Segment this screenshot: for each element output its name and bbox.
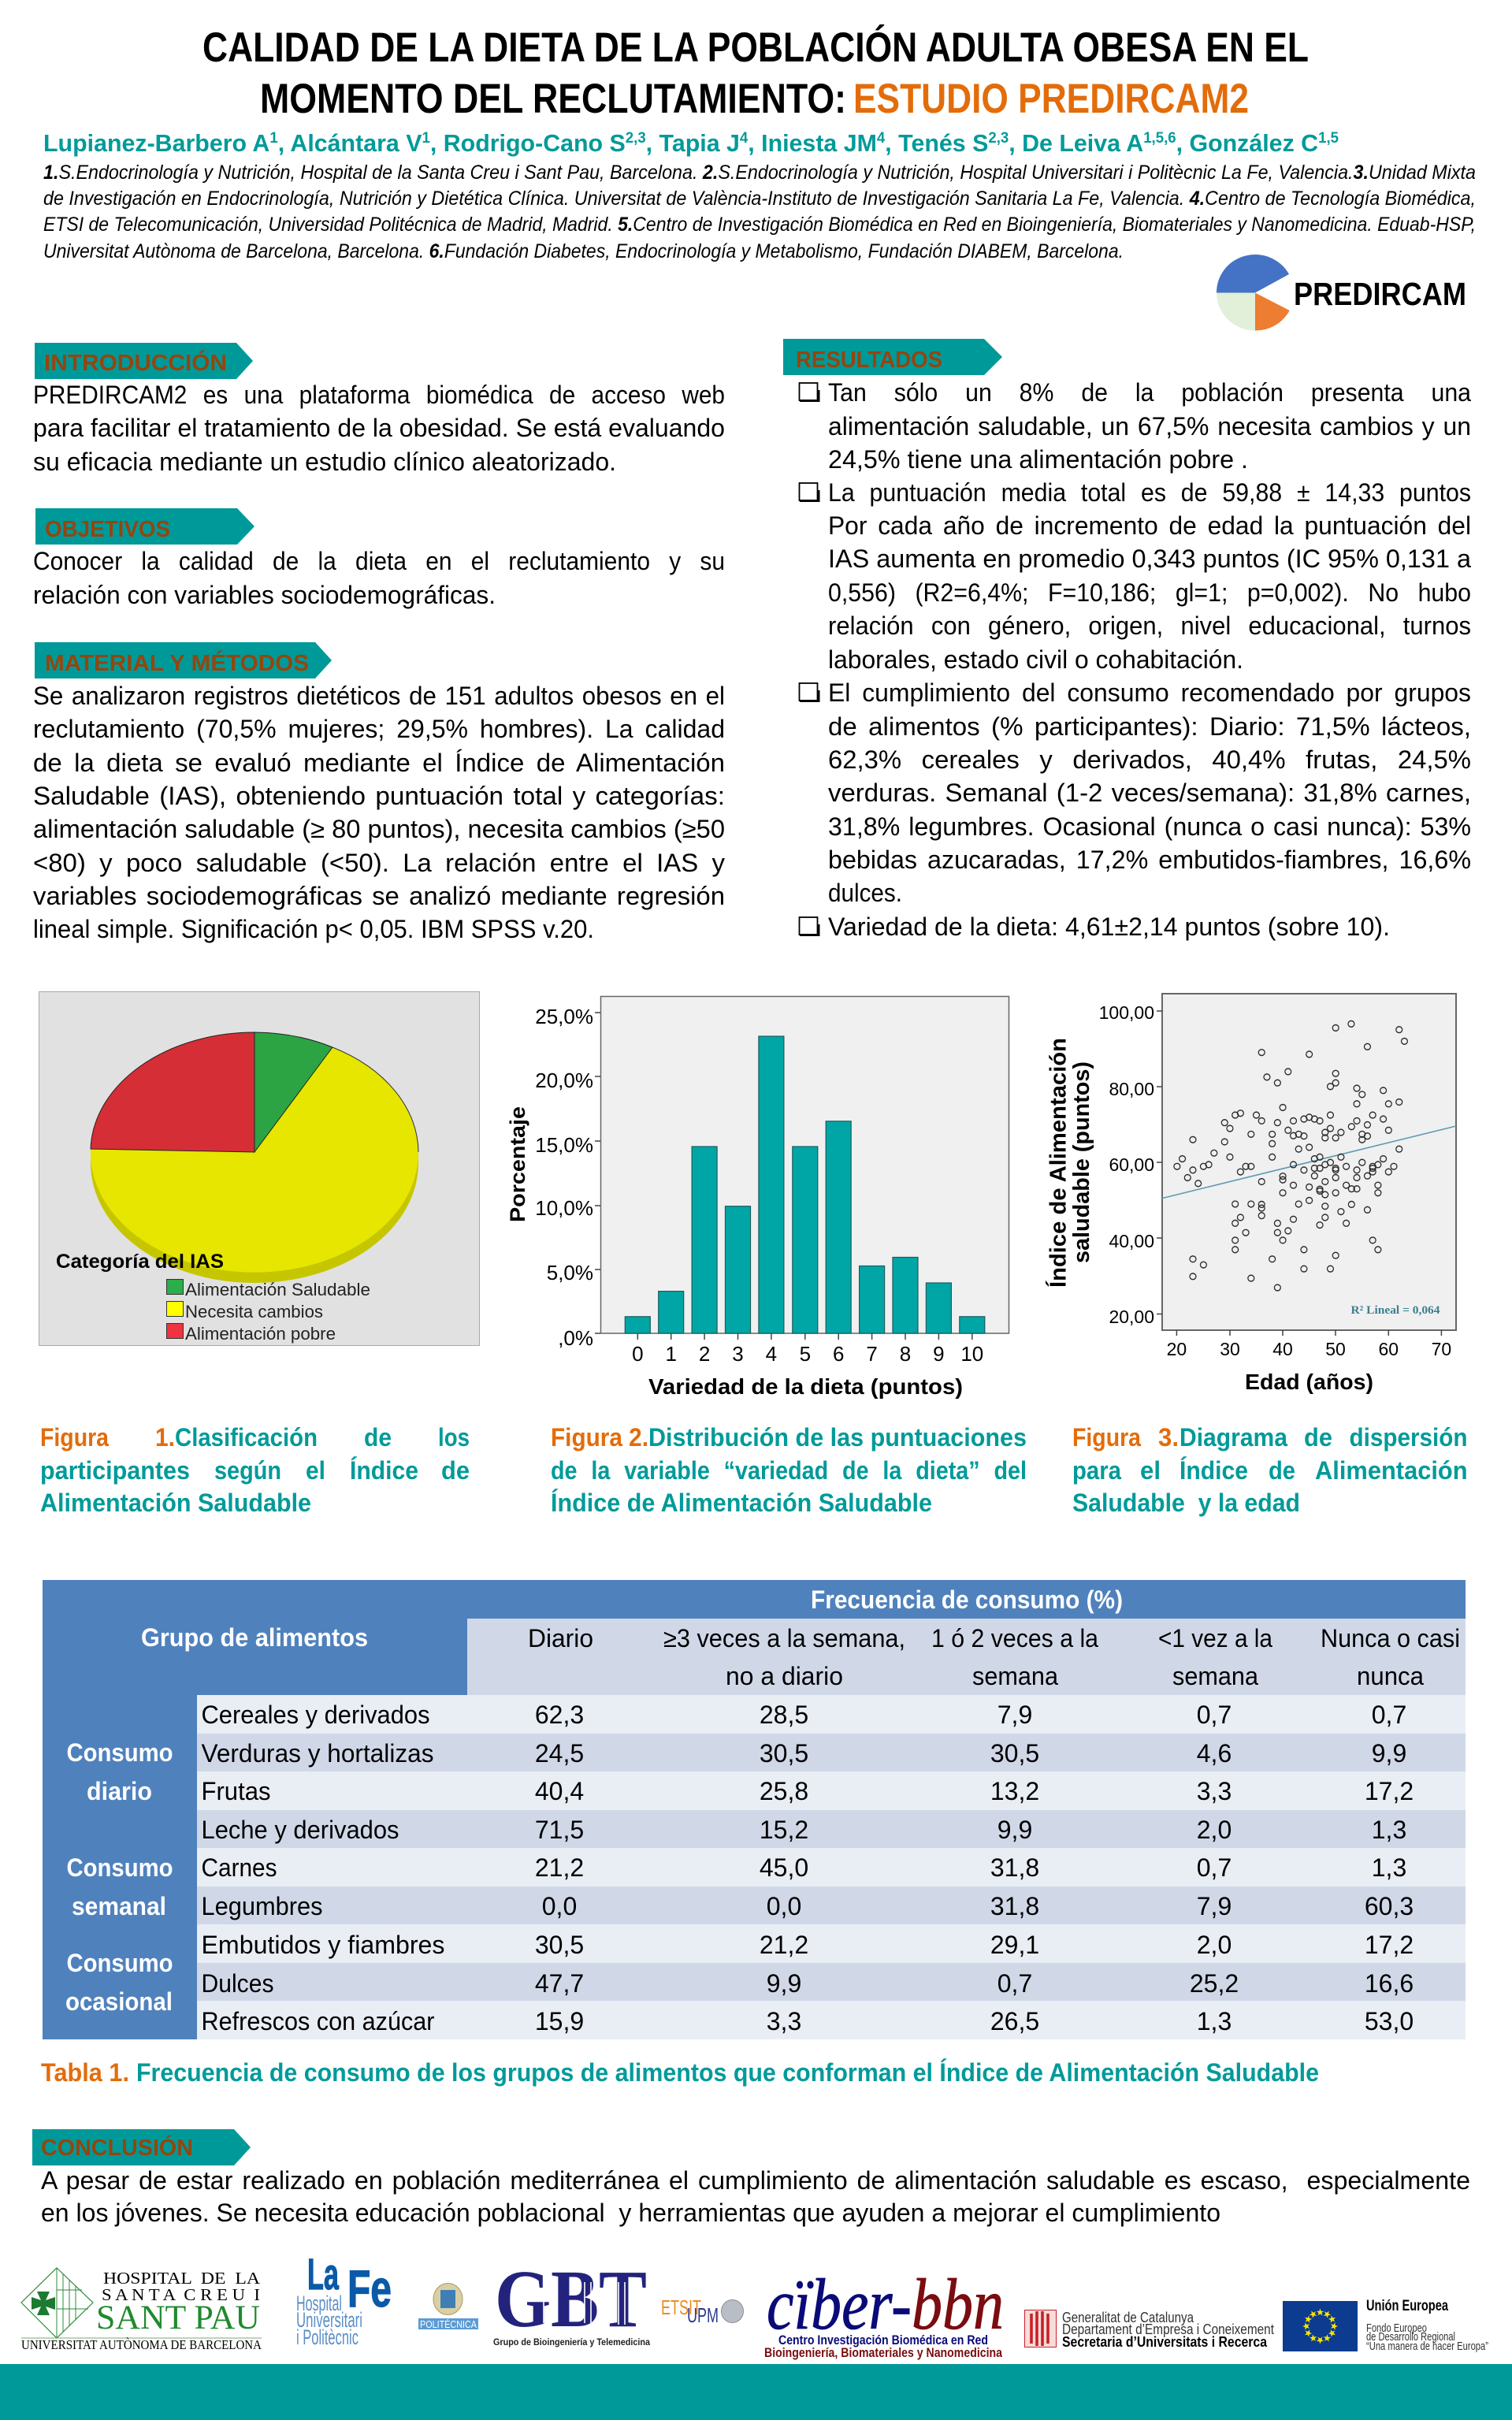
table row labels: Cereales y derivados — [202, 1701, 430, 1729]
table: frecuencia de consumo — [43, 1580, 1466, 2039]
y axis labels: 15,0% — [535, 1133, 593, 1157]
table values: 40,4 — [535, 1777, 584, 1805]
y axis labels: 60,00 — [1109, 1154, 1154, 1175]
x axis labels: 3 — [732, 1342, 744, 1366]
legend — [56, 1251, 370, 1344]
logo: CIBER-BBN: cïber- — [767, 2264, 912, 2344]
caption: figura 3: Alimentación — [1315, 1456, 1468, 1485]
text: bullet 3: verduras. Semanal (1-2 veces/semana): 31,8% carnes, — [828, 779, 1471, 807]
table values: 16,6 — [1365, 1969, 1414, 1998]
y axis labels: ,0% — [558, 1326, 593, 1350]
panel: conclusión — [32, 2129, 1470, 2227]
x axis labels: 2 — [699, 1342, 710, 1366]
heading: material y métodos: MATERIAL Y MÉTODOS — [45, 649, 309, 676]
text: introducción: PREDIRCAM2 es una plataforma biomédica de acceso web — [33, 381, 725, 409]
text: bullet 3 — [828, 678, 1471, 907]
caption: figura 3: 3. — [1158, 1423, 1179, 1452]
chart: scatter IAS y edad — [1045, 994, 1456, 1394]
bars — [625, 1036, 985, 1333]
table values: 26,5 — [990, 2007, 1039, 2035]
text: material y métodos: Se analizaron registros dietéticos de 151 adultos obesos en el — [33, 682, 725, 710]
caption: tabla 1: Frecuencia de consumo de los grupos de alimentos que conforman el Índice de Alimentación Saludable — [136, 2058, 1319, 2087]
table values: 1,3 — [1372, 1816, 1406, 1844]
y axis labels: 10,0% — [535, 1196, 593, 1220]
table column headers: Nunca o casi — [1321, 1624, 1460, 1652]
text: objetivos: relación con variables sociodemográficas. — [33, 581, 496, 609]
logo: La Fe: i Politècnic — [296, 2325, 358, 2349]
title: MOMENTO DEL RECLUTAMIENTO: — [260, 76, 846, 122]
x axis labels: 9 — [933, 1342, 945, 1366]
logo: ETSIT UPM — [661, 2295, 744, 2327]
text: conclusión: en los jóvenes. Se necesita educación poblacional y herramientas que ayuden a mejorar el cumplimiento — [41, 2199, 1220, 2227]
text: bullet 2 — [828, 478, 1471, 674]
x axis labels: 50 — [1325, 1339, 1346, 1359]
logo: La Fe — [296, 2249, 392, 2349]
text: bullet 3: bebidas azucaradas, 17,2% embutidos-fiambres, 16,6% — [828, 846, 1471, 874]
logo: Unión Europea — [1283, 2298, 1488, 2353]
table values: 7,9 — [1197, 1892, 1232, 1920]
caption: figura 3 — [1072, 1423, 1468, 1517]
table column headers: <1 vez a la — [1158, 1624, 1272, 1652]
table row labels: Carnes — [202, 1853, 277, 1882]
caption: figura 3: para — [1072, 1456, 1121, 1485]
authors: , González C — [1176, 129, 1318, 157]
table values: 25,8 — [760, 1777, 808, 1805]
x axis labels: 4 — [766, 1342, 777, 1366]
caption: figura 1: según — [214, 1456, 281, 1485]
authors: 1,5 — [1318, 130, 1339, 147]
logo: Generalitat de Catalunya: Departament d’Empresa i Coneixement — [1062, 2321, 1274, 2337]
table values: 45,0 — [760, 1853, 808, 1882]
text: bullet 3: El cumplimiento del consumo recomendado por grupos — [828, 678, 1471, 707]
panel: material y métodos — [33, 642, 725, 943]
title: ESTUDIO PREDIRCAM2 — [853, 76, 1249, 122]
text: bullet 2: La puntuación media total es de 59,88 ± 14,33 puntos — [828, 478, 1471, 507]
logo: Generalitat de Catalunya: Generalitat de Catalunya — [1062, 2310, 1194, 2325]
caption: figura 1: Índice — [350, 1456, 418, 1485]
bullet icon 2 — [799, 483, 819, 501]
caption: figura 1: 1. — [155, 1423, 175, 1452]
table values: 30,5 — [760, 1739, 808, 1768]
table values: 0,7 — [1197, 1853, 1232, 1882]
authors: Lupianez-Barbero A — [43, 129, 274, 157]
caption: figura 2: de la variable “variedad de la dieta” del — [551, 1456, 1027, 1485]
text: bullet 1: Tan sólo un 8% de la población presenta una — [828, 378, 1471, 407]
slice: necesita cambios — [91, 1047, 418, 1273]
table values: 13,2 — [990, 1777, 1039, 1805]
caption: figura 3: Figura — [1072, 1423, 1141, 1452]
table group headings: Consumo — [66, 1738, 173, 1767]
logo: Generalitat de Catalunya: Secretaria d’Universitats i Recerca — [1062, 2334, 1268, 2350]
text: bullet 4: Variedad de la dieta: 4,61±2,14 puntos (sobre 10). — [828, 913, 1390, 941]
R squared label: R² Lineal = 0,064 — [1350, 1304, 1440, 1317]
heading: objetivos — [35, 508, 254, 545]
caption: figura 1 — [40, 1423, 470, 1517]
x axis labels: 0 — [632, 1342, 644, 1366]
table column headers: 1 ó 2 veces a la — [931, 1624, 1098, 1652]
table values: 71,5 — [535, 1816, 584, 1844]
x axis labels: 6 — [833, 1342, 844, 1366]
table row labels: Legumbres — [202, 1892, 323, 1920]
logo: Hospital de la Santa Creu i Sant Pau: SANT PAU — [96, 2299, 260, 2336]
table values: 21,2 — [535, 1853, 584, 1882]
table header background — [43, 1580, 1466, 2039]
x axis title: Variedad de la dieta (puntos) — [648, 1374, 963, 1399]
scatter points — [1174, 1020, 1407, 1291]
text: introducción: para facilitar el tratamiento de la obesidad. Se está evaluando — [33, 414, 725, 442]
table values: 0,7 — [1197, 1701, 1232, 1729]
table column headers: no a diario — [726, 1662, 843, 1690]
slice: alimentación pobre — [91, 1032, 254, 1152]
caption: figura 1: participantes — [40, 1456, 190, 1485]
logo: PREDIRCAM: PREDIRCAM — [1294, 276, 1466, 312]
authors: 4 — [877, 130, 886, 147]
text: material y métodos — [33, 682, 725, 943]
y axis title: Porcentaje — [506, 1106, 529, 1222]
table values: 60,3 — [1365, 1892, 1414, 1920]
authors: 1,5,6 — [1143, 130, 1176, 147]
legend: Necesita cambios — [185, 1302, 323, 1322]
table values: 7,9 — [997, 1701, 1032, 1729]
caption: figura 3: de — [1269, 1456, 1295, 1485]
table row labels: Verduras y hortalizas — [202, 1739, 433, 1768]
table row labels — [202, 1701, 444, 2035]
text: bullet 2: IAS aumenta en promedio 0,343 puntos (IC 95% 0,131 a — [828, 545, 1471, 573]
bullet icon 1 — [799, 383, 819, 400]
text: material y métodos: alimentación saludable (≥ 80 puntos), necesita cambios (≥50 — [33, 815, 725, 843]
caption: figura 1: Clasificación — [175, 1423, 318, 1452]
table group headings: Frecuencia de consumo (%) — [811, 1585, 1123, 1614]
text: bullet 2: relación con género, origen, nivel educacional, turnos — [828, 612, 1471, 640]
x axis title: Edad (años) — [1245, 1370, 1373, 1394]
logo: CIBER-BBN: Bioingeniería, Biomateriales y Nanomedicina — [764, 2345, 1002, 2360]
bullet icon 3 — [799, 683, 819, 701]
logo: La Fe: La — [307, 2249, 340, 2299]
table group headings: diario — [87, 1777, 152, 1805]
text: material y métodos: <80) y poco saludable (<50). La relación entre el IAS y — [33, 849, 725, 877]
bullet icon 4 — [799, 917, 819, 935]
table values: 9,9 — [997, 1816, 1032, 1844]
text: bullet 1: 24,5% tiene una alimentación pobre . — [828, 445, 1248, 474]
table values: 0,0 — [767, 1892, 801, 1920]
logo: CIBER-BBN: bbn — [912, 2264, 1004, 2344]
y axis title: Índice de Alimentación — [1045, 1038, 1072, 1288]
text: bullet 3: 62,3% cereales y derivados, 40,4% frutas, 24,5% — [828, 745, 1471, 774]
affiliations: de Investigación en Endocrinología, Nutrición y Dietética Clínica. Universitat de València-Instituto de Investigación Sanitaria La Fe, Valencia. 4.Centro de Tecnología Biomédica, — [43, 188, 1476, 210]
table values: 25,2 — [1190, 1969, 1239, 1998]
regression line — [1162, 1126, 1456, 1199]
table values: 15,2 — [760, 1816, 808, 1844]
logo: ETSIT UPM: UPM — [687, 2303, 719, 2327]
table values: 17,2 — [1365, 1931, 1414, 1959]
y axis title — [1045, 1038, 1094, 1288]
text: material y métodos: variables sociodemográficas se analizó mediante regresión — [33, 882, 725, 910]
y axis labels: 40,00 — [1109, 1231, 1154, 1251]
text: conclusión — [41, 2166, 1470, 2227]
table values: 53,0 — [1365, 2007, 1414, 2035]
table rows background — [197, 1695, 1466, 2039]
table column headers: ≥3 veces a la semana, — [663, 1624, 905, 1652]
authors: 2,3 — [988, 130, 1009, 147]
table row labels: Dulces — [202, 1969, 274, 1998]
heading: objetivos: OBJETIVOS — [45, 517, 170, 542]
text: material y métodos: de la dieta se evaluó mediante el Índice de Alimentación — [33, 749, 725, 777]
caption: figura 1: los — [438, 1423, 470, 1452]
caption: figura 3: Índice — [1180, 1456, 1248, 1485]
table group headings — [65, 1585, 1123, 2016]
table values: 3,3 — [1197, 1777, 1232, 1805]
heading: material y métodos — [35, 642, 332, 678]
text: conclusión: A pesar de estar realizado en población mediterránea el cumplimiento de alimentación saludable es escaso, especialmente — [41, 2166, 1470, 2195]
panel: introducción — [33, 343, 725, 476]
table group headings: Grupo de alimentos — [141, 1623, 368, 1652]
x axis labels: 20 — [1167, 1339, 1187, 1359]
table values: 0,7 — [1372, 1701, 1406, 1729]
caption: figura 2 — [551, 1423, 1027, 1517]
table values: 9,9 — [1372, 1739, 1406, 1768]
table values: 28,5 — [760, 1701, 808, 1729]
table values: 31,8 — [990, 1892, 1039, 1920]
y axis labels: 20,00 — [1109, 1307, 1154, 1327]
table row labels: Frutas — [202, 1777, 271, 1805]
table values: 17,2 — [1365, 1777, 1414, 1805]
panel: objetivos — [33, 508, 725, 609]
caption: figura 3: Diagrama — [1180, 1423, 1287, 1452]
logo: CIBER-BBN: Centro Investigación Biomédica en Red — [778, 2333, 988, 2348]
x axis labels: 5 — [800, 1342, 811, 1366]
table values: 29,1 — [990, 1931, 1039, 1959]
logo: La Fe: Fe — [347, 2259, 392, 2318]
table values: 21,2 — [760, 1931, 808, 1959]
affiliations: Universitat Autònoma de Barcelona, Barcelona. 6.Fundación Diabetes, Endocrinología y Metabolismo, Fundación DIABEM, Barcelona. — [43, 240, 1124, 262]
table values: 62,3 — [535, 1701, 584, 1729]
caption: figura 1: Alimentación Saludable — [40, 1489, 311, 1517]
legend: Alimentación pobre — [185, 1324, 336, 1344]
logo: Politécnica: POLITÉCNICA — [420, 2318, 477, 2330]
x axis labels: 7 — [866, 1342, 878, 1366]
table values: 15,9 — [535, 2007, 584, 2035]
authors: 1 — [422, 130, 430, 147]
authors: , Tapia J — [646, 129, 740, 157]
text: bullet 2: Por cada año de incremento de edad la puntuación del — [828, 511, 1471, 540]
table values: 2,0 — [1197, 1931, 1232, 1959]
y axis labels — [1099, 1002, 1154, 1327]
text: introducción: su eficacia mediante un estudio clínico aleatorizado. — [33, 448, 616, 476]
y axis labels: 25,0% — [535, 1005, 593, 1028]
x axis labels: 10 — [960, 1342, 983, 1366]
text: bullet 3: 31,8% legumbres. Ocasional (nunca o casi nunca): 53% — [828, 812, 1471, 841]
table values: 0,7 — [997, 1969, 1032, 1998]
y axis labels: 100,00 — [1099, 1002, 1154, 1023]
table column headers: semana — [972, 1662, 1058, 1690]
table values — [535, 1701, 1414, 2035]
x axis labels: 70 — [1432, 1339, 1451, 1359]
logo: PREDIRCAM — [1217, 255, 1466, 331]
footer band — [0, 2364, 1512, 2420]
x axis labels: 30 — [1220, 1339, 1240, 1359]
text: material y métodos: Saludable (IAS), obteniendo puntuación total y categorías: — [33, 782, 725, 810]
authors: , Alcántara V — [278, 129, 422, 157]
panel: resultados — [783, 339, 1471, 941]
x axis labels — [632, 1342, 983, 1366]
table group headings: Consumo — [66, 1853, 173, 1882]
table values: 30,5 — [535, 1931, 584, 1959]
table row labels: Leche y derivados — [202, 1816, 399, 1844]
table values: 24,5 — [535, 1739, 584, 1768]
y axis title: saludable (puntos) — [1069, 1061, 1094, 1263]
logo: Hospital de la Santa Creu i Sant Pau: S A N T A C R E U I — [102, 2285, 260, 2304]
caption: figura 3: de — [1304, 1423, 1332, 1452]
text: objetivos: Conocer la calidad de la dieta en el reclutamiento y su — [33, 547, 725, 575]
text: material y métodos: lineal simple. Significación p< 0,05. IBM SPSS v.20. — [33, 915, 594, 943]
y axis labels: 20,0% — [535, 1069, 593, 1092]
logo: CIBER-BBN — [764, 2264, 1004, 2360]
table values: 1,3 — [1197, 2007, 1232, 2035]
authors: , Tenés S — [885, 129, 988, 157]
x axis labels — [1167, 1339, 1451, 1359]
y axis labels: 80,00 — [1109, 1079, 1154, 1099]
affiliations: 1.S.Endocrinología y Nutrición, Hospital de la Santa Creu i Sant Pau, Barcelona. 2.S.Endocrinología y Nutrición, Hospital Universitari i Politècnic La Fe, Valencia.3.Unidad Mixta — [43, 162, 1476, 184]
x axis labels: 60 — [1379, 1339, 1399, 1359]
table column headers: Diario — [528, 1624, 593, 1652]
caption: figura 3: el — [1140, 1456, 1161, 1485]
x axis labels: 1 — [665, 1342, 677, 1366]
text: bullet 1: alimentación saludable, un 67,5% necesita cambios y un — [828, 412, 1471, 441]
affiliations: ETSI de Telecomunicación, Universidad Politécnica de Madrid, Madrid. 5.Centro de Investigación Biomédica en Red en Bioingeniería, Biomateriales y Nanomedicina. Eduab-HSP, — [43, 214, 1476, 236]
authors: 1 — [269, 130, 278, 147]
text: bullet 3: de alimentos (% participantes): Diario: 71,5% lácteos, — [828, 712, 1471, 741]
table row labels: Embutidos y fiambres — [202, 1931, 444, 1959]
slice: alimentación saludable — [254, 1032, 332, 1152]
heading: conclusión — [32, 2129, 251, 2165]
text: introducción — [33, 381, 725, 476]
authors: , Rodrigo-Cano S — [430, 129, 626, 157]
logo: GBT: Grupo de Bioingeniería y Telemedicina — [493, 2336, 650, 2348]
table values: 47,7 — [535, 1969, 584, 1998]
text: objetivos — [33, 547, 725, 609]
table values: 4,6 — [1197, 1739, 1232, 1768]
table group headings: ocasional — [65, 1987, 173, 2016]
table values: 9,9 — [767, 1969, 801, 1998]
logo: Unión Europea: Unión Europea — [1366, 2298, 1448, 2314]
table column headers — [528, 1624, 1460, 1690]
title — [202, 24, 1309, 122]
table column headers: semana — [1172, 1662, 1258, 1690]
caption: figura 1: el — [306, 1456, 325, 1485]
heading: introducción — [35, 343, 253, 379]
logo: Hospital de la Santa Creu i Sant Pau — [21, 2268, 262, 2352]
logo: Politécnica — [418, 2284, 478, 2330]
table values: 30,5 — [990, 1739, 1039, 1768]
logo: GBT: GBT — [495, 2254, 647, 2344]
caption: figura 1: de — [364, 1423, 392, 1452]
chart: pie IAS — [39, 991, 479, 1346]
heading: resultados — [783, 339, 1002, 375]
x axis labels: 40 — [1272, 1339, 1293, 1359]
text: bullet 2: laborales, estado civil o cohabitación. — [828, 645, 1243, 674]
caption: figura 1: Figura — [40, 1423, 109, 1452]
heading: introducción: INTRODUCCIÓN — [44, 349, 227, 376]
table group headings: semanal — [72, 1892, 166, 1920]
authors: 4 — [740, 130, 749, 147]
table values: 3,3 — [767, 2007, 801, 2035]
text: bullet 3: dulces. — [828, 879, 902, 907]
table values: 1,3 — [1372, 1853, 1406, 1882]
caption: figura 1: de — [441, 1456, 470, 1485]
logo: Generalitat de Catalunya — [1024, 2310, 1274, 2350]
table row labels: Refrescos con azúcar — [202, 2007, 435, 2035]
logo: Unión Europea: de Desarrollo Regional — [1366, 2330, 1455, 2344]
legend: Categoría del IAS — [56, 1251, 224, 1273]
caption: figura 2: Índice de Alimentación Saludable — [551, 1489, 932, 1517]
text: material y métodos: reclutamiento (70,5% mujeres; 29,5% hombres). La calidad — [33, 715, 725, 743]
table values: 2,0 — [1197, 1816, 1232, 1844]
authors: , Iniesta JM — [748, 129, 877, 157]
heading: conclusión: CONCLUSIÓN — [41, 2134, 193, 2161]
caption: figura 2: Distribución de las puntuaciones — [648, 1423, 1027, 1452]
title: CALIDAD DE LA DIETA DE LA POBLACIÓN ADULTA OBESA EN EL — [202, 24, 1309, 71]
logo: ETSIT UPM: ETSIT — [661, 2295, 701, 2319]
logo: La Fe: Universitari — [296, 2308, 362, 2332]
table values: 0,0 — [542, 1892, 577, 1920]
caption: figura 3: dispersión — [1349, 1423, 1467, 1452]
table values: 31,8 — [990, 1853, 1039, 1882]
logo: Unión Europea: Fondo Europeo — [1366, 2321, 1427, 2335]
text: bullet 1 — [828, 378, 1471, 474]
caption: figura 2: Figura 2. — [551, 1423, 648, 1452]
caption: tabla 1: Tabla 1. — [41, 2058, 129, 2087]
authors: 2,3 — [626, 130, 646, 147]
logo: Hospital de la Santa Creu i Sant Pau: UNIVERSITAT AUTÒNOMA DE BARCELONA — [21, 2337, 262, 2352]
logo: La Fe: Hospital — [296, 2292, 342, 2315]
logo: Hospital de la Santa Creu i Sant Pau: HOSPITAL DE LA — [103, 2269, 261, 2288]
caption: figura 3: Saludable y la edad — [1072, 1489, 1300, 1517]
chart: bar variedad de la dieta — [506, 996, 1009, 1399]
table column headers: nunca — [1357, 1662, 1424, 1690]
y axis labels: 5,0% — [547, 1261, 593, 1284]
heading: resultados: RESULTADOS — [796, 348, 942, 373]
affiliations — [43, 162, 1476, 262]
text: bullet 2: 0,556) (R2=6,4%; F=10,186; gl=1; p=0,002). No hubo — [828, 578, 1471, 607]
table group headings: Consumo — [66, 1949, 173, 1977]
authors: , De Leiva A — [1009, 129, 1143, 157]
x axis labels: 8 — [900, 1342, 911, 1366]
legend: Alimentación Saludable — [185, 1280, 370, 1299]
y axis labels — [535, 1005, 593, 1350]
